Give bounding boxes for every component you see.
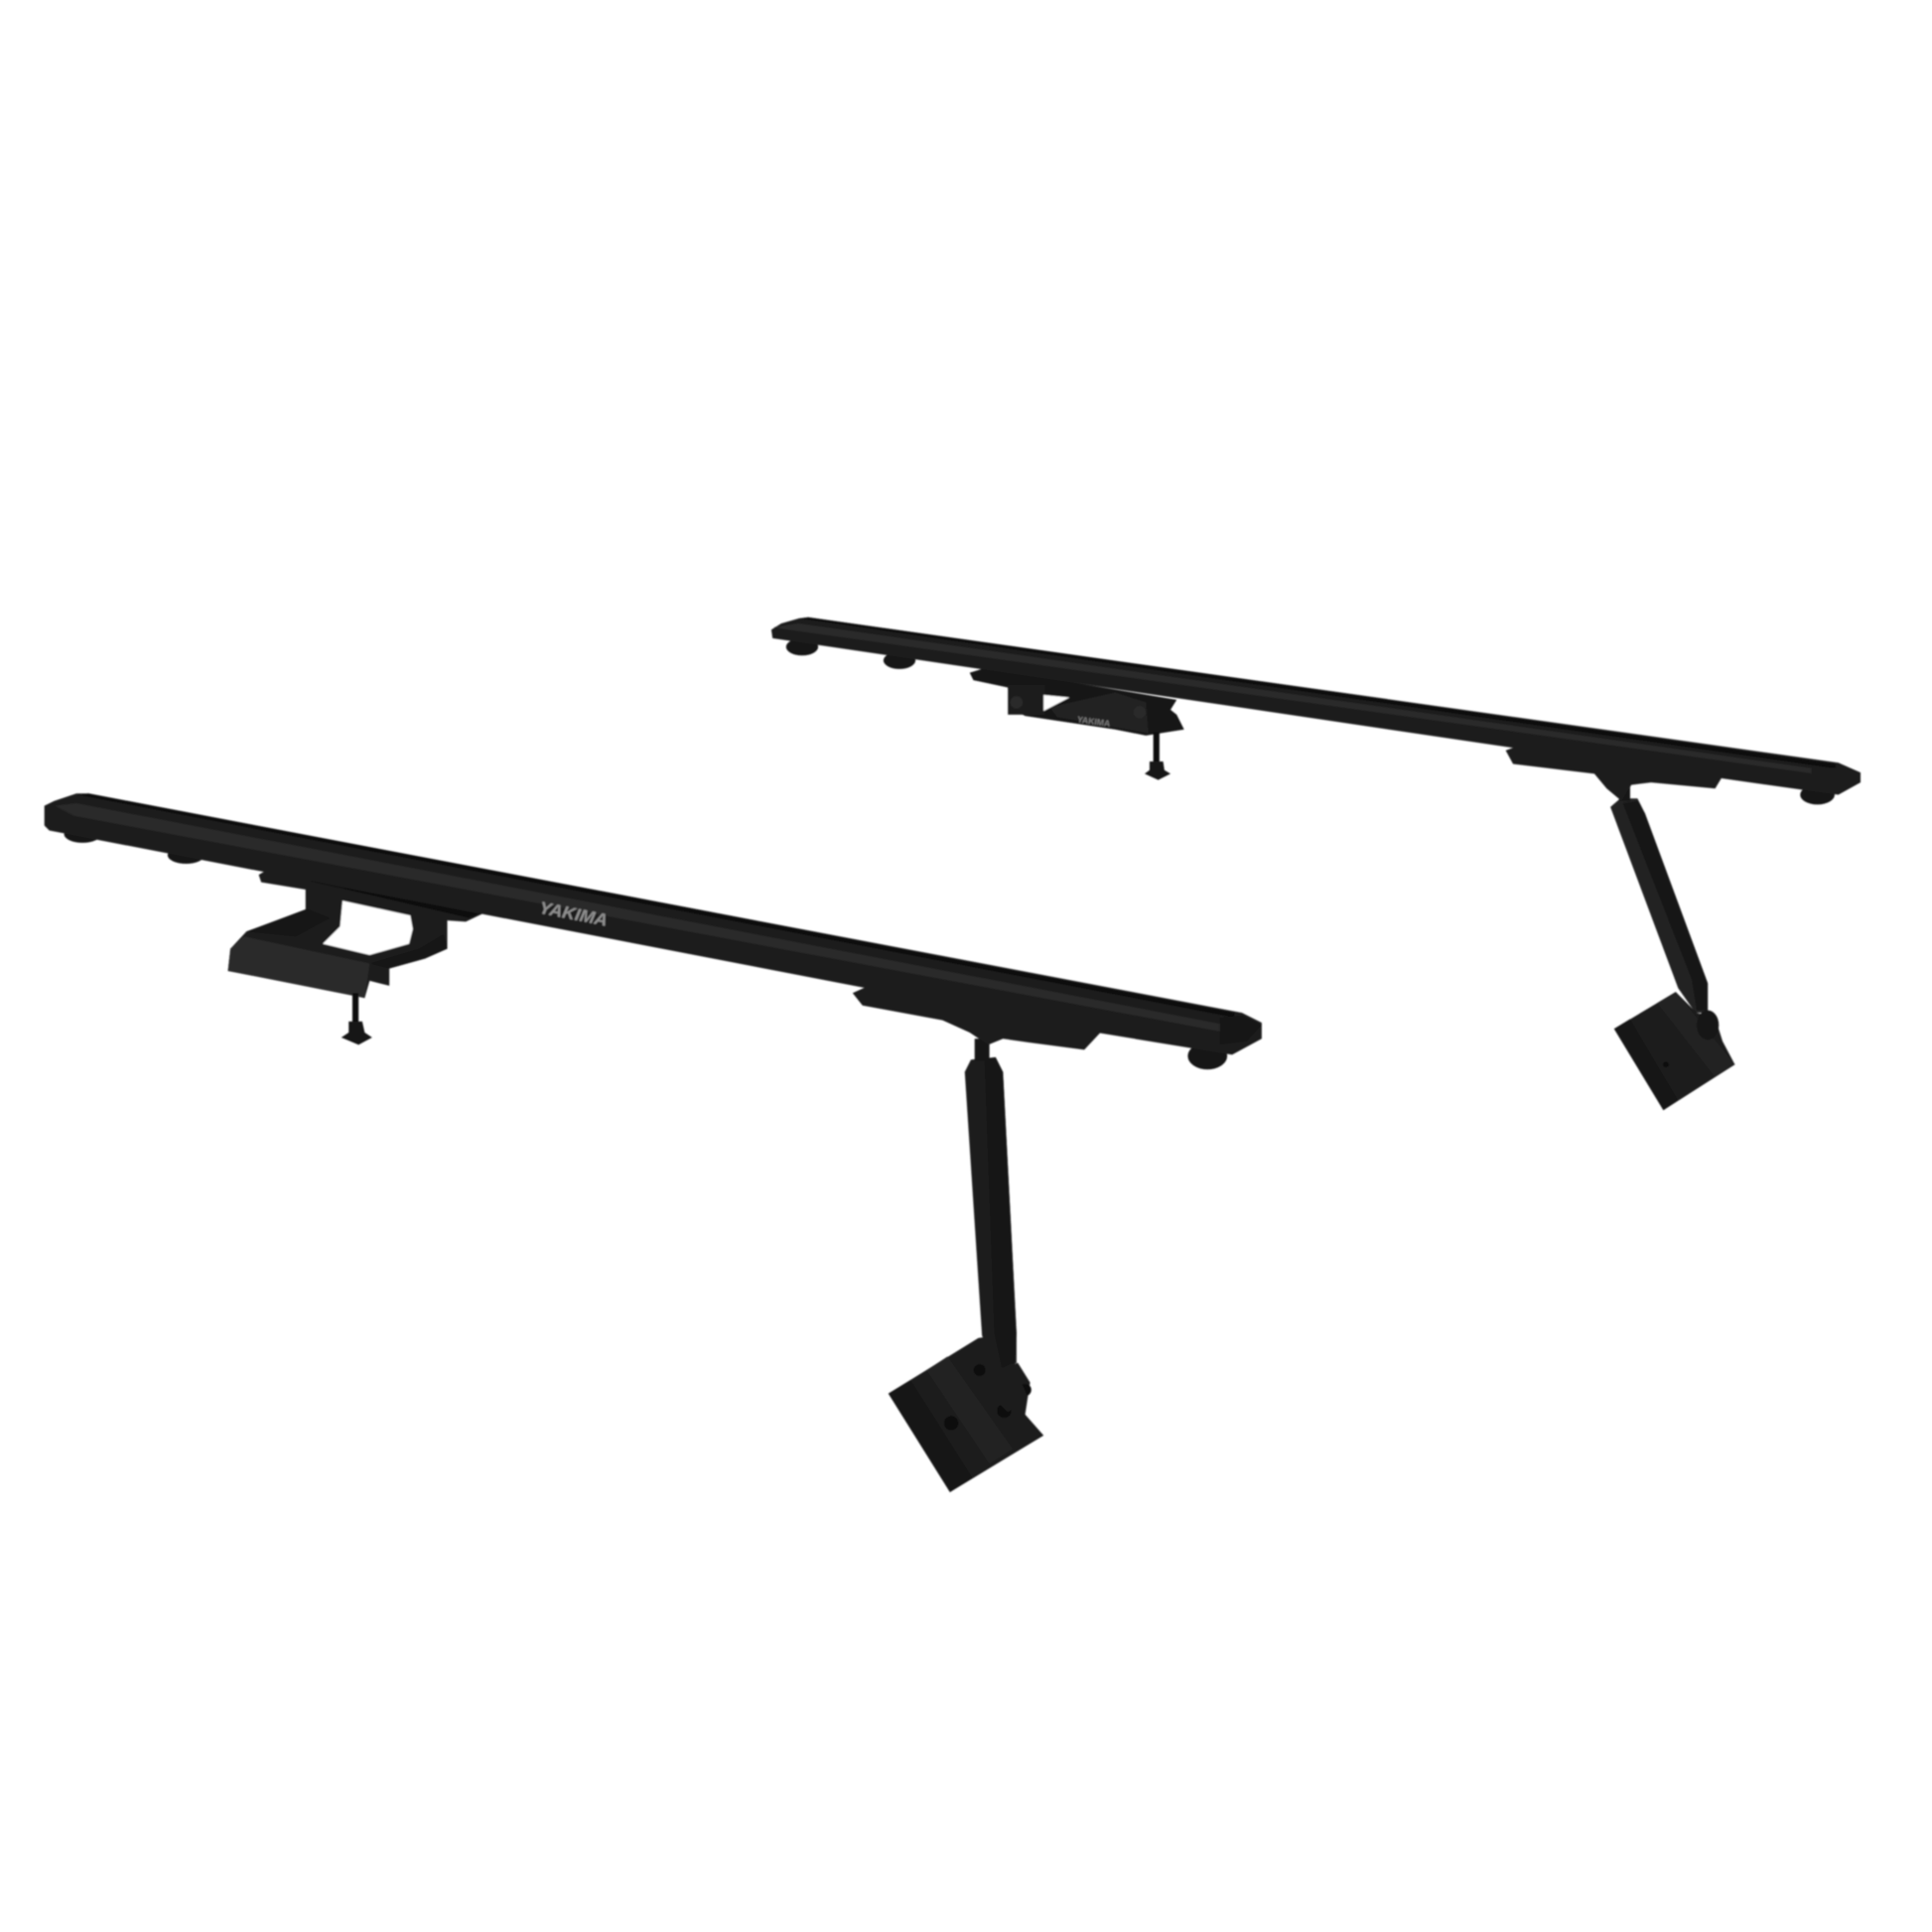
front bar lower block — [889, 1337, 1043, 1492]
front bar logo: YAKIMA — [538, 897, 610, 930]
front bar rail — [45, 793, 1262, 1054]
front crossbar assembly — [45, 793, 1262, 1492]
clamp logo: YAKIMA — [1076, 714, 1112, 729]
front bar feet — [65, 826, 1227, 1069]
rear bar rail — [771, 618, 1861, 794]
rear bar arm — [1610, 781, 1708, 1013]
front bar clamp — [228, 868, 486, 1044]
front bar arm — [965, 1038, 1017, 1374]
rear bar clamp — [970, 668, 1184, 780]
rear crossbar assembly — [771, 618, 1861, 1110]
rear bar feet — [786, 638, 1835, 804]
rear bar lower block — [1614, 992, 1734, 1110]
rear bar mount plate right — [1506, 745, 1723, 801]
block fittings — [944, 1364, 1032, 1431]
front bar mount plate right — [853, 986, 1103, 1049]
